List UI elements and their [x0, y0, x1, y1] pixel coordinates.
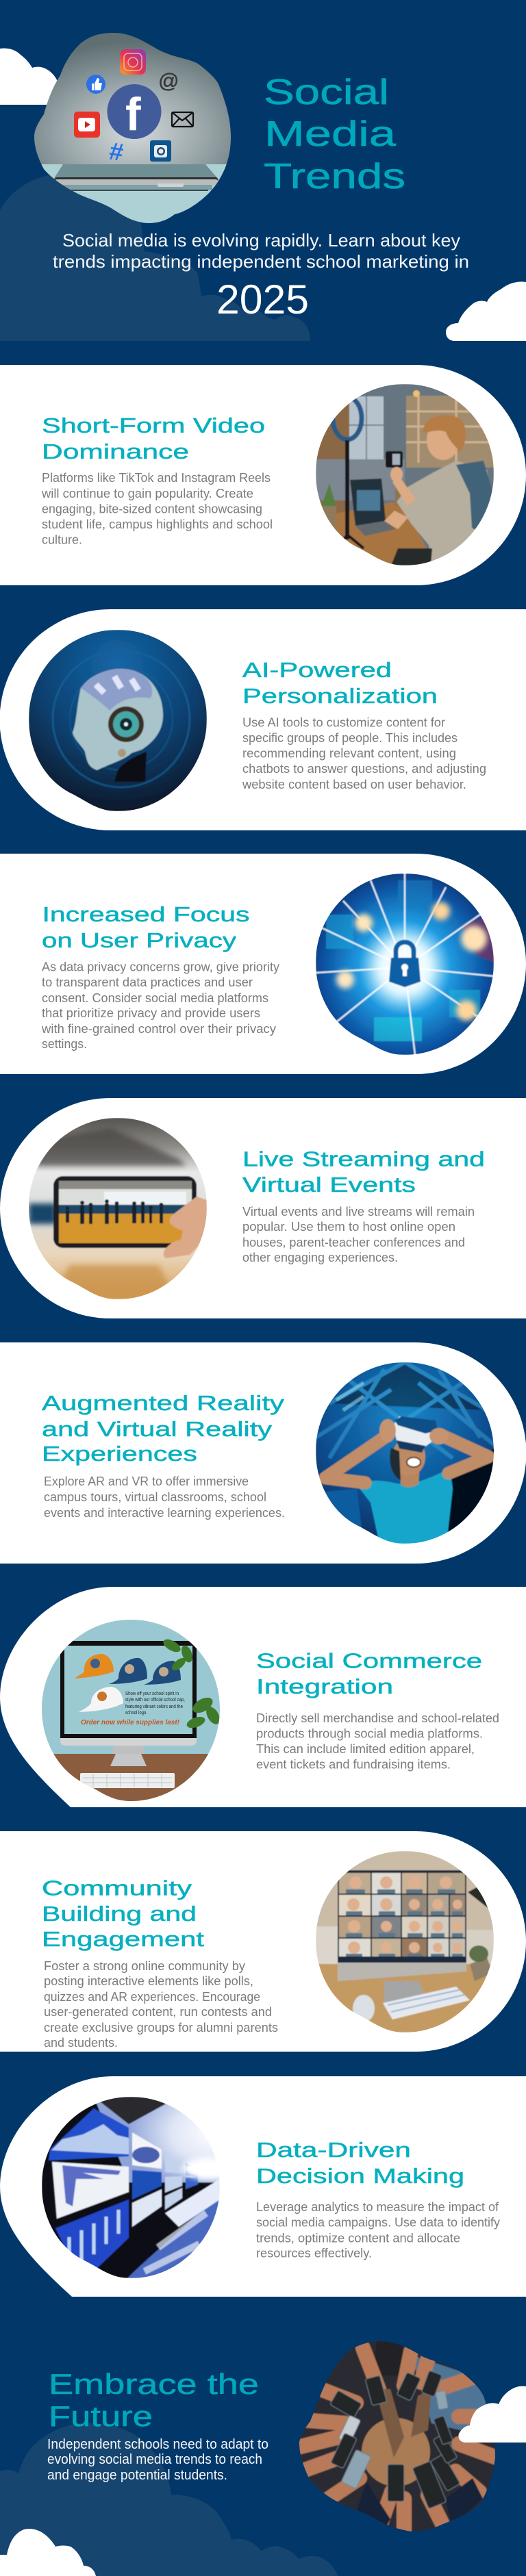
closing heading: Embrace the — [49, 2368, 259, 2400]
heading: Engagement — [42, 1927, 205, 1951]
body text — [256, 1711, 499, 1772]
footer section — [0, 2338, 526, 2576]
heading — [42, 1876, 205, 1951]
body text: posting interactive elements like polls, — [44, 1974, 253, 1988]
ring light — [333, 397, 362, 439]
caps — [75, 1654, 181, 1712]
call grid — [339, 1873, 465, 1956]
image: wall of data screens over earth — [42, 2097, 237, 2278]
phone — [53, 164, 218, 191]
header section — [0, 27, 526, 341]
body text: Use AI tools to customize content for — [242, 716, 445, 730]
arms — [325, 1435, 488, 1483]
heading: Experiences — [42, 1442, 197, 1466]
white cloud bottom left — [0, 2529, 96, 2576]
body text: specific groups of people. This includes — [242, 731, 458, 745]
white cloud right — [458, 2386, 526, 2443]
image: glowing padlock — [316, 873, 494, 1055]
body text: This can include limited edition apparel, — [256, 1742, 475, 1756]
closing text: Independent schools need to adapt to — [47, 2437, 268, 2452]
closing image: ring of hands holding phones — [295, 2338, 500, 2536]
heading: Community — [42, 1876, 192, 1900]
icon: facebook: f — [125, 88, 141, 140]
heading: Virtual Events — [242, 1173, 416, 1197]
keyboard and headphones — [383, 1987, 470, 2019]
closing text: evolving social media trends to reach — [47, 2452, 262, 2467]
panel: community building — [0, 1831, 526, 2052]
small right screens — [132, 2132, 162, 2169]
chart screens — [49, 2108, 129, 2160]
screen copy: Order now while supplies last! — [81, 1719, 180, 1726]
plant — [163, 1639, 219, 1728]
players — [66, 1199, 163, 1224]
image: phone filming gym — [29, 1118, 207, 1299]
hero image: social media icons rising from phone — [34, 33, 231, 223]
image: student filming video at desk — [316, 384, 495, 565]
screen copy — [81, 1692, 185, 1726]
person — [396, 461, 488, 561]
neck — [399, 1471, 421, 1488]
icon: camera app — [150, 140, 171, 162]
heading — [42, 413, 265, 463]
title: Media — [264, 114, 396, 154]
screen copy: style with our official school cap, — [125, 1698, 185, 1703]
heading: Personalization — [242, 684, 438, 708]
heading: AI-Powered — [242, 658, 392, 682]
panel: AI-powered personalization — [0, 609, 526, 830]
closing text: and engage potential students. — [47, 2468, 227, 2483]
body text: engaging, bite-sized content showcasing — [42, 502, 262, 516]
participants — [347, 1876, 462, 1954]
heading — [256, 2138, 464, 2188]
body text: recommending relevant content, using — [242, 746, 456, 760]
body text: houses, parent-teacher conferences and — [242, 1236, 465, 1249]
faint background cloud — [0, 2423, 338, 2576]
heading — [256, 1648, 482, 1698]
panel: data-driven — [0, 2076, 526, 2297]
shirt — [356, 1468, 453, 1544]
icon: at sign: @ — [158, 70, 179, 92]
heading — [242, 658, 438, 708]
phones — [330, 2371, 460, 2509]
panel: short-form video — [0, 365, 526, 585]
screen copy: school logo. — [125, 1711, 147, 1716]
body text: As data privacy concerns grow, give priority — [42, 960, 279, 973]
arms — [298, 2348, 497, 2529]
image: video call on desktop monitor — [316, 1851, 494, 2032]
body text: user-generated content, run contests and — [44, 2005, 272, 2019]
screen copy: Show off your school spirit in — [125, 1692, 179, 1696]
body text — [44, 1959, 278, 2050]
year: 2025 — [216, 277, 309, 322]
title: Trends — [264, 157, 405, 196]
body text: student life, campus highlights and school — [42, 518, 273, 531]
closing heading — [49, 2368, 259, 2432]
body text: event tickets and fundraising items. — [256, 1758, 451, 1772]
heading — [242, 1147, 485, 1197]
screen copy: featuring vibrant colors and the — [125, 1705, 183, 1709]
face — [393, 1442, 426, 1472]
body text: resources effectively. — [256, 2247, 372, 2260]
body text: Directly sell merchandise and school-related — [256, 1711, 499, 1725]
heading: Integration — [256, 1674, 393, 1698]
closing text — [47, 2437, 268, 2483]
panel: AR and VR — [0, 1342, 526, 1564]
hands — [379, 1419, 396, 1442]
heading: Building and — [42, 1902, 197, 1926]
body text: settings. — [42, 1037, 87, 1051]
intro text: Social media is evolving rapidly. Learn about key — [62, 230, 460, 251]
body text — [41, 960, 279, 1051]
white cloud right — [446, 281, 526, 341]
body text: with fine-grained control over their privacy — [41, 1022, 276, 1036]
body text: to transparent data practices and user — [42, 975, 253, 989]
title: Social — [264, 73, 389, 112]
heading: Short-Form Video — [42, 413, 265, 437]
body text: products through social media platforms. — [256, 1726, 483, 1740]
body text: quizzes and AR experiences. Encourage — [44, 1990, 260, 2004]
white cloud top left — [0, 49, 71, 105]
body text — [41, 471, 273, 546]
body text: create exclusive groups for alumni parents — [44, 2021, 278, 2035]
body text: popular. Use them to host online open — [242, 1220, 455, 1234]
body text: chatbots to answer questions, and adjusting — [242, 762, 486, 776]
heading: Increased Focus — [42, 902, 249, 926]
body text: consent. Consider social media platforms — [42, 991, 268, 1005]
heading — [42, 1391, 285, 1466]
intro text: trends impacting independent school marketing in — [53, 251, 469, 272]
icon: youtube — [74, 112, 100, 138]
heading: Dominance — [42, 439, 189, 463]
panel: social commerce — [0, 1587, 526, 1807]
body text: culture. — [42, 533, 82, 546]
body text: Leverage analytics to measure the impact of — [256, 2200, 499, 2214]
heading: Social Commerce — [256, 1648, 482, 1673]
headset — [393, 1416, 438, 1446]
body text: and students. — [44, 2036, 118, 2050]
body text — [242, 716, 486, 791]
icon: like — [86, 75, 105, 94]
image: person wearing VR headset — [316, 1362, 495, 1544]
body text: trends, optimize content and allocate — [256, 2232, 460, 2245]
title — [264, 73, 405, 196]
body text — [242, 1205, 475, 1264]
hand — [164, 1197, 207, 1258]
lock — [396, 942, 414, 959]
body text — [256, 2200, 500, 2260]
icon: envelope — [172, 112, 193, 127]
image: school caps on monitor — [42, 1620, 223, 1801]
heading: and Virtual Reality — [42, 1417, 273, 1441]
body text: other engaging experiences. — [242, 1251, 398, 1264]
faint background cloud — [0, 173, 310, 341]
heading: on User Privacy — [42, 928, 237, 952]
earth — [127, 2189, 220, 2278]
icon: instagram — [120, 49, 146, 75]
body text: campus tours, virtual classrooms, school — [44, 1490, 266, 1504]
heading: Live Streaming and — [242, 1147, 485, 1171]
closing heading: Future — [49, 2400, 153, 2432]
body text: Foster a strong online community by — [44, 1959, 245, 1973]
body text: will continue to gain popularity. Create — [41, 487, 253, 500]
heading — [42, 902, 249, 952]
body text — [44, 1475, 285, 1520]
monitor — [338, 1961, 466, 1981]
heading: Augmented Reality — [42, 1391, 285, 1415]
panel: user privacy — [0, 854, 526, 1074]
monitor — [60, 1641, 197, 1738]
intro text — [53, 230, 469, 272]
body text: that prioritize privacy and provide users — [42, 1006, 260, 1020]
heading: Data-Driven — [256, 2138, 411, 2162]
icon: hashtag: # — [108, 137, 125, 166]
body text: events and interactive learning experiences. — [44, 1506, 285, 1520]
body text: Virtual events and live streams will remain — [242, 1205, 475, 1219]
image: AI robot head — [29, 630, 207, 811]
body text: social media campaigns. Use data to identify — [256, 2215, 500, 2229]
icon: facebook — [107, 84, 162, 140]
panel: live streaming — [0, 1098, 526, 1318]
body text: Platforms like TikTok and Instagram Reels — [42, 471, 271, 485]
laptop — [350, 479, 386, 526]
phone and screen — [53, 1176, 197, 1248]
body text: Explore AR and VR to offer immersive — [44, 1475, 249, 1488]
body text: website content based on user behavior. — [242, 778, 466, 791]
heading: Decision Making — [256, 2164, 464, 2188]
